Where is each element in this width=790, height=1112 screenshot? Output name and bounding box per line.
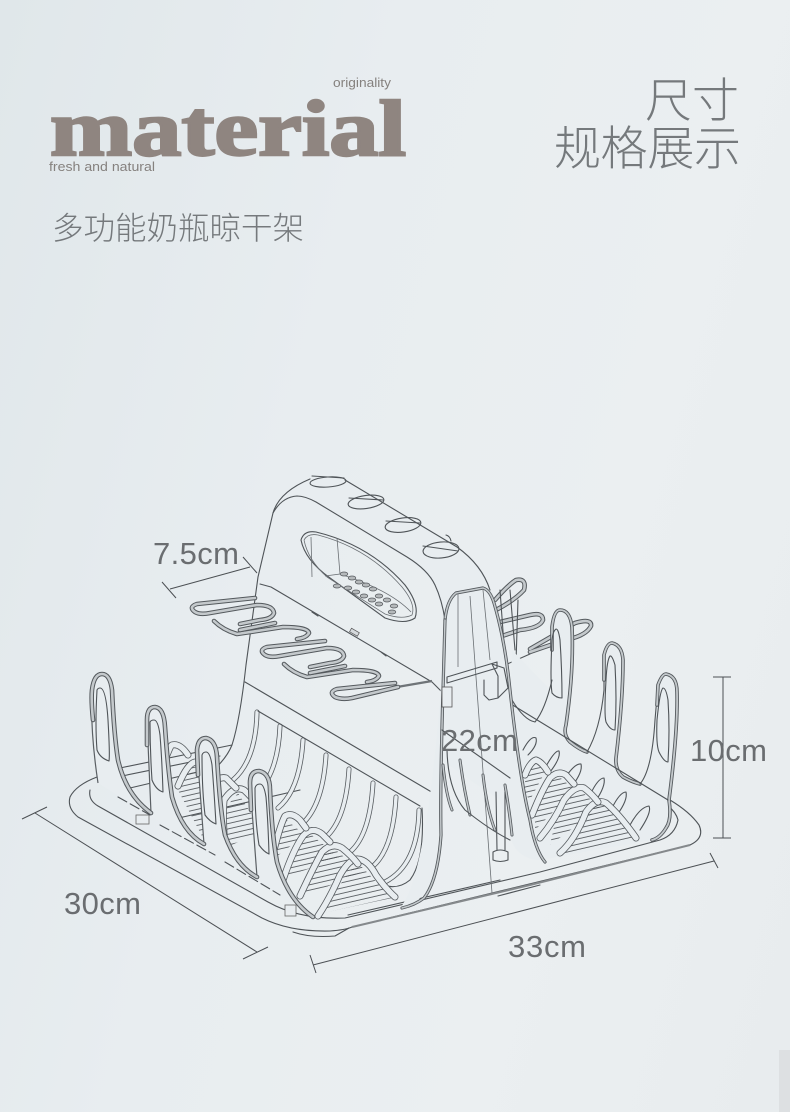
background corner strip: [779, 1050, 790, 1112]
handle panel: [258, 476, 490, 622]
title: size specification: 尺寸: [645, 62, 739, 131]
drying rack line drawing: [69, 476, 701, 936]
heading: material: material: [50, 86, 406, 173]
drip tray: [69, 777, 701, 936]
subheading: fresh and natural: fresh and natural: [49, 160, 155, 174]
ribs of left basket: [233, 711, 422, 887]
top holes: [310, 476, 460, 560]
title: size specification: 规格展示: [554, 110, 741, 179]
dimension: 33cm: 33cm: [508, 929, 586, 964]
rear prongs behind pillar: [495, 580, 591, 665]
dimension: 22cm: 22cm: [441, 723, 518, 758]
foot: [493, 792, 508, 862]
dimension: 10cm: [690, 677, 767, 838]
arched bottle supports, left basket: [160, 745, 395, 916]
central pillar: [400, 588, 545, 908]
dimension: 33cm: [310, 853, 718, 973]
title: size specification: [554, 62, 741, 179]
carry handle opening: [301, 532, 416, 622]
arches and hatch: [522, 760, 640, 855]
back fold of left basket: [120, 577, 440, 820]
dimension: 10cm: 10cm: [690, 733, 767, 768]
right fingers: [510, 610, 677, 860]
dimension: 7.5cm: [153, 536, 257, 598]
heading: originality: originality: [333, 76, 392, 90]
dimension: 30cm: [22, 807, 268, 959]
product name: 多功能奶瓶晾干架: [52, 203, 304, 249]
slanted rib tips: [523, 738, 650, 830]
dimension: 7.5cm: 7.5cm: [153, 536, 239, 571]
right basket: [510, 610, 677, 860]
prongs: [192, 598, 398, 699]
dimension: 30cm: 30cm: [64, 886, 141, 921]
front fingers of left basket: [92, 674, 313, 917]
clips: [447, 662, 497, 683]
bottle shelf: [192, 584, 442, 699]
inner ribs under pillar: [442, 730, 512, 840]
